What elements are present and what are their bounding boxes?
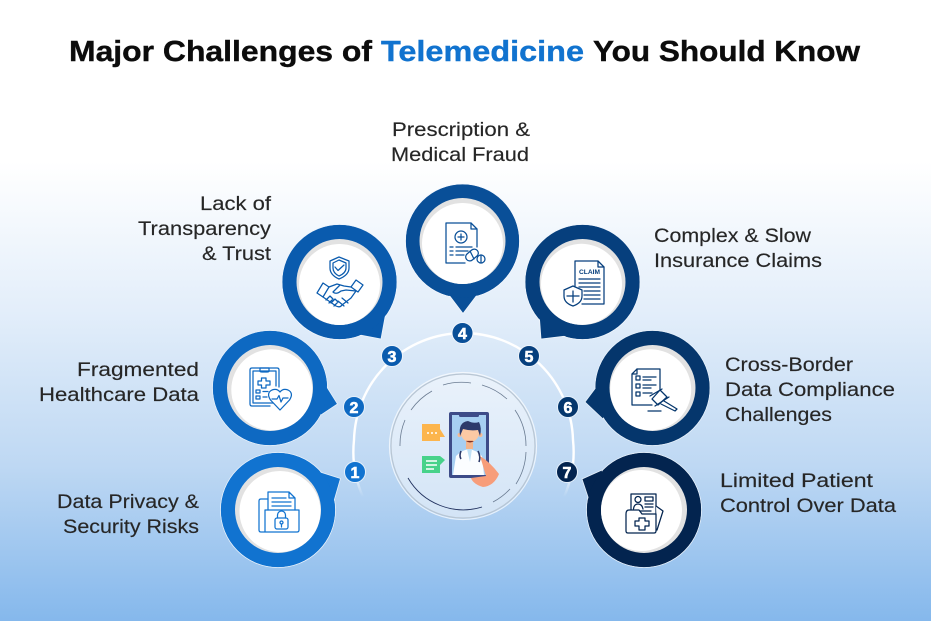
label 6: Data Compliance (725, 379, 895, 401)
label 6 (725, 354, 895, 426)
label 7 (720, 470, 896, 517)
label 7: Control Over Data (720, 495, 896, 517)
label 7: Limited Patient (720, 470, 874, 492)
icon: locked folder (259, 492, 299, 532)
badge 4: 4 (458, 326, 467, 343)
badge 1: 1 (351, 465, 360, 482)
label 3 (138, 193, 272, 265)
icon: shield and handshake (317, 257, 363, 307)
badge 5 (518, 346, 540, 366)
badge 7: 7 (563, 465, 572, 482)
badge 7 (556, 462, 578, 482)
label 2: Healthcare Data (39, 384, 199, 406)
badge 6: 6 (564, 400, 573, 417)
label 6: Challenges (725, 404, 832, 426)
label 5 (654, 225, 822, 272)
bubble 1 (220, 452, 340, 568)
chat bubble yellow (422, 424, 445, 441)
panel: 4 Prescription Fraud (391, 119, 530, 344)
title: You Should Know (593, 36, 860, 68)
label 4: Prescription & (392, 119, 530, 141)
label 2: Fragmented (77, 359, 199, 381)
badge 3: 3 (388, 349, 397, 366)
bubble 2 (212, 330, 338, 446)
badge 2: 2 (350, 400, 359, 417)
icon: prescription and pills (446, 223, 485, 263)
bubble 7 (582, 452, 702, 568)
icon: compliance document and gavel (632, 369, 677, 411)
icon: clipboard with heart (250, 368, 291, 410)
label 3: Lack of (200, 193, 272, 215)
label 1: Data Privacy & (57, 491, 199, 513)
phone with doctor (449, 412, 499, 487)
badge 3 (382, 346, 402, 366)
label 1 (57, 491, 199, 538)
label 6: Cross-Border (725, 354, 854, 376)
label 3: Transparency (138, 218, 271, 240)
label 3: & Trust (202, 243, 272, 265)
badge 4 (452, 322, 473, 344)
panel: 2 Fragmented Data (39, 330, 364, 446)
label 1: Security Risks (63, 516, 199, 538)
panel: 1 Data Privacy (57, 452, 366, 568)
panel: 3 Transparency & Trust (138, 193, 402, 366)
bubble 3 (282, 224, 397, 340)
label 5: Insurance Claims (654, 250, 822, 272)
panel: 6 Data Compliance (558, 330, 895, 446)
icon: patient folder (626, 494, 663, 533)
label 4: Medical Fraud (391, 144, 529, 166)
bubble 5 (525, 224, 640, 340)
title: Telemedicine (381, 36, 584, 68)
title: Major Challenges of (69, 36, 372, 68)
badge 2 (344, 396, 364, 418)
panel: 7 Patient Control (556, 452, 896, 568)
badge 6 (558, 396, 578, 418)
icon: insurance claim: CLAIM (579, 269, 600, 276)
central doctor illustration (390, 372, 536, 520)
title (69, 36, 860, 68)
badge 5: 5 (525, 349, 534, 366)
bubble 4 (406, 184, 520, 314)
label 2 (39, 359, 199, 406)
connecting arc (353, 333, 574, 497)
badge 1 (344, 462, 366, 482)
label 4 (391, 119, 530, 166)
label 5: Complex & Slow (654, 225, 812, 247)
icon: insurance claim (564, 261, 604, 306)
bubble 6 (585, 330, 710, 446)
panel: 5 Insurance Claims (518, 224, 822, 366)
chat bubble green (422, 456, 445, 473)
